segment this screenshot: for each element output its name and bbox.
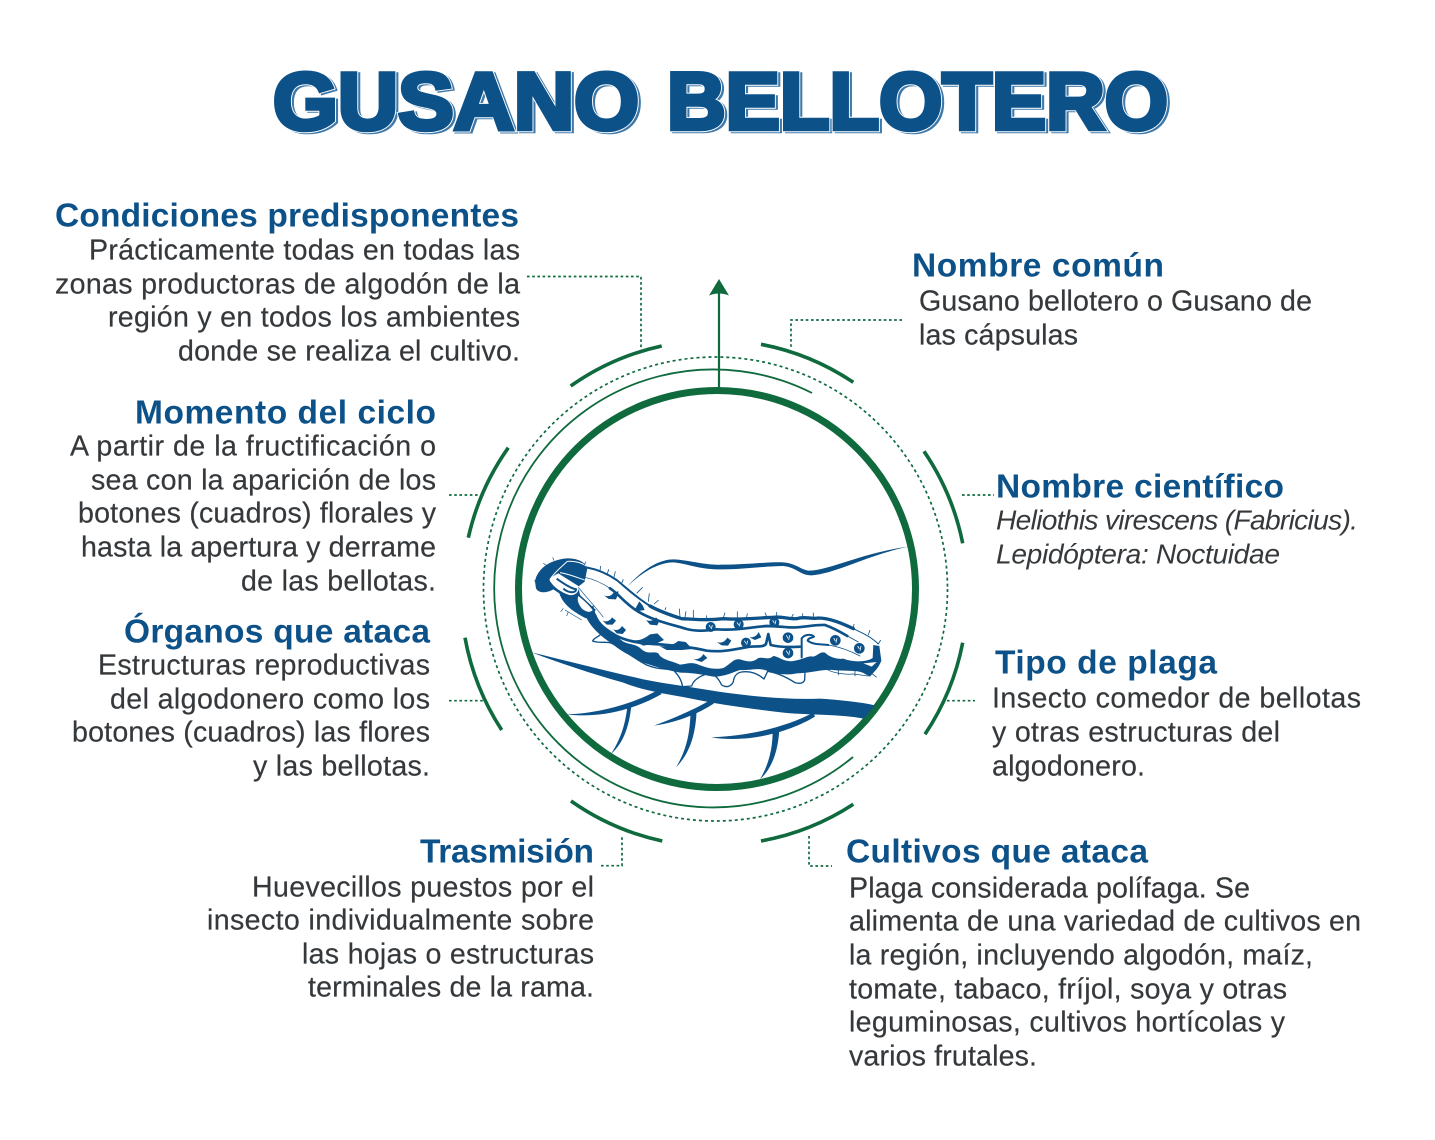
text block: Cultivos que ataca	[846, 834, 1361, 1072]
icon: stem line	[627, 547, 908, 587]
icon: body lines	[585, 568, 878, 687]
title: GUSANO	[273, 57, 639, 147]
text block: Trasmisión: insecto individualmente sobre	[207, 904, 594, 936]
icon: spines	[600, 566, 881, 677]
circle diagram rings	[484, 357, 948, 821]
text block: Momento del ciclo: sea con la aparición de los	[91, 464, 436, 496]
text block: Condiciones predisponentes: Condiciones predisponentes	[55, 198, 519, 234]
title	[273, 57, 1170, 148]
text block: Momento del ciclo: Momento del ciclo	[135, 394, 436, 432]
text block: Órganos que ataca: botones (cuadros) las flores	[72, 716, 430, 748]
icon: swoosh spots	[603, 591, 761, 662]
text block: Cultivos que ataca: Cultivos que ataca	[846, 834, 1148, 870]
text block: Nombre científico: Lepidóptera: Noctuidae	[996, 538, 1280, 570]
text block: Nombre científico: Nombre científico	[996, 468, 1284, 506]
text block: Cultivos que ataca: Plaga considerada polífaga. Se	[849, 872, 1250, 904]
text block: Tipo de plaga: Insecto comedor de bellotas	[992, 682, 1361, 714]
text block: Momento del ciclo: botones (cuadros) florales y	[78, 498, 437, 530]
text block: Momento del ciclo	[70, 394, 437, 598]
title: BELLOTERO	[667, 57, 1168, 147]
icon: rosette highlights	[709, 620, 861, 655]
text block: Nombre común	[912, 248, 1312, 352]
text block: Condiciones predisponentes	[55, 198, 520, 368]
text block: Condiciones predisponentes: zonas productoras de algodón de la	[55, 268, 520, 300]
illustration: caterpillar on branch	[532, 547, 908, 779]
text block: Órganos que ataca: Órganos que ataca	[124, 612, 430, 650]
title: GUSANO	[273, 57, 639, 147]
text block: Nombre común: Gusano bellotero o Gusano de	[919, 286, 1312, 318]
text block: Nombre científico	[996, 468, 1358, 570]
title: GUSANO	[276, 58, 642, 148]
text block: Nombre científico: Heliothis virescens (Fabricius).	[996, 504, 1358, 536]
text block: Trasmisión: Trasmisión	[420, 834, 594, 870]
text block: Trasmisión: las hojas o estructuras	[302, 938, 594, 970]
text block: Momento del ciclo: de las bellotas.	[241, 566, 436, 598]
text block: Tipo de plaga: y otras estructuras del	[992, 716, 1280, 748]
text block: Trasmisión: Huevecillos puestos por el	[252, 872, 594, 904]
arrow	[709, 279, 729, 389]
icon: body band	[584, 605, 881, 677]
text block: Órganos que ataca	[72, 612, 430, 782]
text block: Cultivos que ataca: leguminosas, cultivos hortícolas y	[849, 1006, 1286, 1038]
text block: Condiciones predisponentes: Prácticamente todas en todas las	[89, 234, 520, 266]
icon: branch	[532, 652, 875, 779]
text block: Cultivos que ataca: la región, incluyendo algodón, maíz,	[849, 940, 1313, 972]
text block: Cultivos que ataca: varios frutales.	[849, 1040, 1037, 1072]
text block: Condiciones predisponentes: donde se realiza el cultivo.	[178, 336, 520, 368]
text block: Momento del ciclo: A partir de la fructificación o	[70, 430, 436, 462]
text block: Trasmisión	[207, 834, 594, 1004]
title: BELLOTERO	[670, 58, 1170, 148]
icon: head	[534, 557, 603, 620]
text block: Tipo de plaga: algodonero.	[992, 750, 1145, 782]
text block: Órganos que ataca: y las bellotas.	[253, 750, 430, 782]
title: BELLOTERO	[667, 57, 1168, 147]
text block: Cultivos que ataca: alimenta de una variedad de cultivos en	[849, 906, 1361, 938]
text block: Condiciones predisponentes: región y en todos los ambientes	[108, 302, 520, 334]
text block: Cultivos que ataca: tomate, tabaco, fríjol, soya y otras	[849, 974, 1287, 1006]
text block: Órganos que ataca: Estructuras reproductivas	[98, 650, 430, 682]
text block: Trasmisión: terminales de la rama.	[308, 972, 594, 1004]
text block: Momento del ciclo: hasta la apertura y derrame	[81, 532, 436, 564]
outer arc segments	[465, 344, 963, 841]
text block: Órganos que ataca: del algodonero como los	[110, 684, 430, 716]
text block: Nombre común: Nombre común	[912, 248, 1164, 284]
text block: Nombre común: las cápsulas	[919, 320, 1078, 352]
icon: rosette spots	[706, 617, 865, 658]
text block: Tipo de plaga: Tipo de plaga	[995, 644, 1217, 682]
text block: Tipo de plaga	[992, 644, 1361, 782]
dotted connectors	[449, 276, 994, 866]
